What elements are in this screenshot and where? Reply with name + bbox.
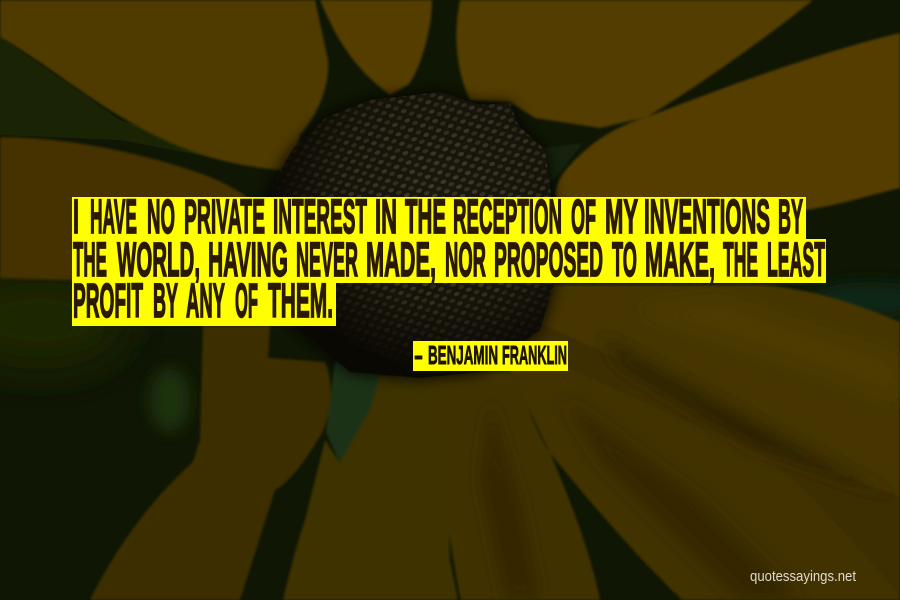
quote line 1: I: [73, 191, 79, 244]
quote line 2: TO: [612, 234, 637, 287]
quote line 2: MAKE,: [645, 234, 715, 287]
petal: top centre: [320, 0, 432, 95]
quote line 2: NEVER: [296, 234, 358, 287]
quote line 2: MADE,: [366, 234, 436, 287]
quote text block: [72, 191, 826, 328]
quote line 1: INTEREST: [273, 191, 367, 244]
attribution: Benjamin Franklin: BENJAMIN: [428, 340, 498, 370]
quote line 1: [72, 191, 806, 244]
quote line 3: [72, 275, 336, 328]
quote line 1: MY: [605, 191, 638, 244]
petal: bottom left: [90, 326, 331, 600]
quote line 1: PRIVATE: [184, 191, 265, 244]
quote line 1: NO: [147, 191, 175, 244]
quote line 2: PROPOSED: [494, 234, 603, 287]
quote text block: BY: [778, 191, 803, 244]
quote line 3: OF: [235, 275, 258, 328]
petal: base under lower-right petals: [510, 295, 900, 600]
quote line 3: BY: [153, 275, 178, 328]
quote text block: THEM.: [268, 275, 333, 328]
quote line 1: THE: [405, 191, 446, 244]
petal: bottom centre: [283, 375, 458, 600]
petal: right upper: [556, 33, 900, 210]
quote line 1: IN: [375, 191, 397, 244]
petal: top left: [0, 0, 328, 170]
flower seed head: [262, 92, 555, 378]
calyx: green sepal right: [525, 143, 583, 195]
quote line 2: NOR: [445, 234, 486, 287]
quote line 2: WORLD,: [117, 234, 200, 287]
quote line 2: [72, 234, 826, 287]
quote line 1: RECEPTION: [453, 191, 562, 244]
quote line 3: ANY: [186, 275, 225, 328]
quote line 2: THE: [723, 234, 758, 287]
streak on lower petals: [600, 335, 900, 500]
quote line 1: HAVE: [90, 191, 137, 244]
petal: right lower: [530, 285, 900, 497]
petal: bottom centre right: [428, 372, 600, 600]
petal: lower right: [515, 345, 900, 600]
quote line 2: HAVING: [208, 234, 288, 287]
text: FRANKLIN: [502, 340, 567, 370]
calyx: green sepal: [326, 362, 382, 463]
attribution: Benjamin Franklin: -: [414, 340, 423, 370]
petal: left: [0, 137, 260, 280]
quote line 2: THE: [73, 234, 107, 287]
quote line 1: OF: [571, 191, 596, 244]
watermark: quotessayings.net: quotessayings.net: [750, 568, 857, 585]
petal: top right: [456, 0, 813, 128]
quote line 3: PROFIT: [73, 275, 143, 328]
